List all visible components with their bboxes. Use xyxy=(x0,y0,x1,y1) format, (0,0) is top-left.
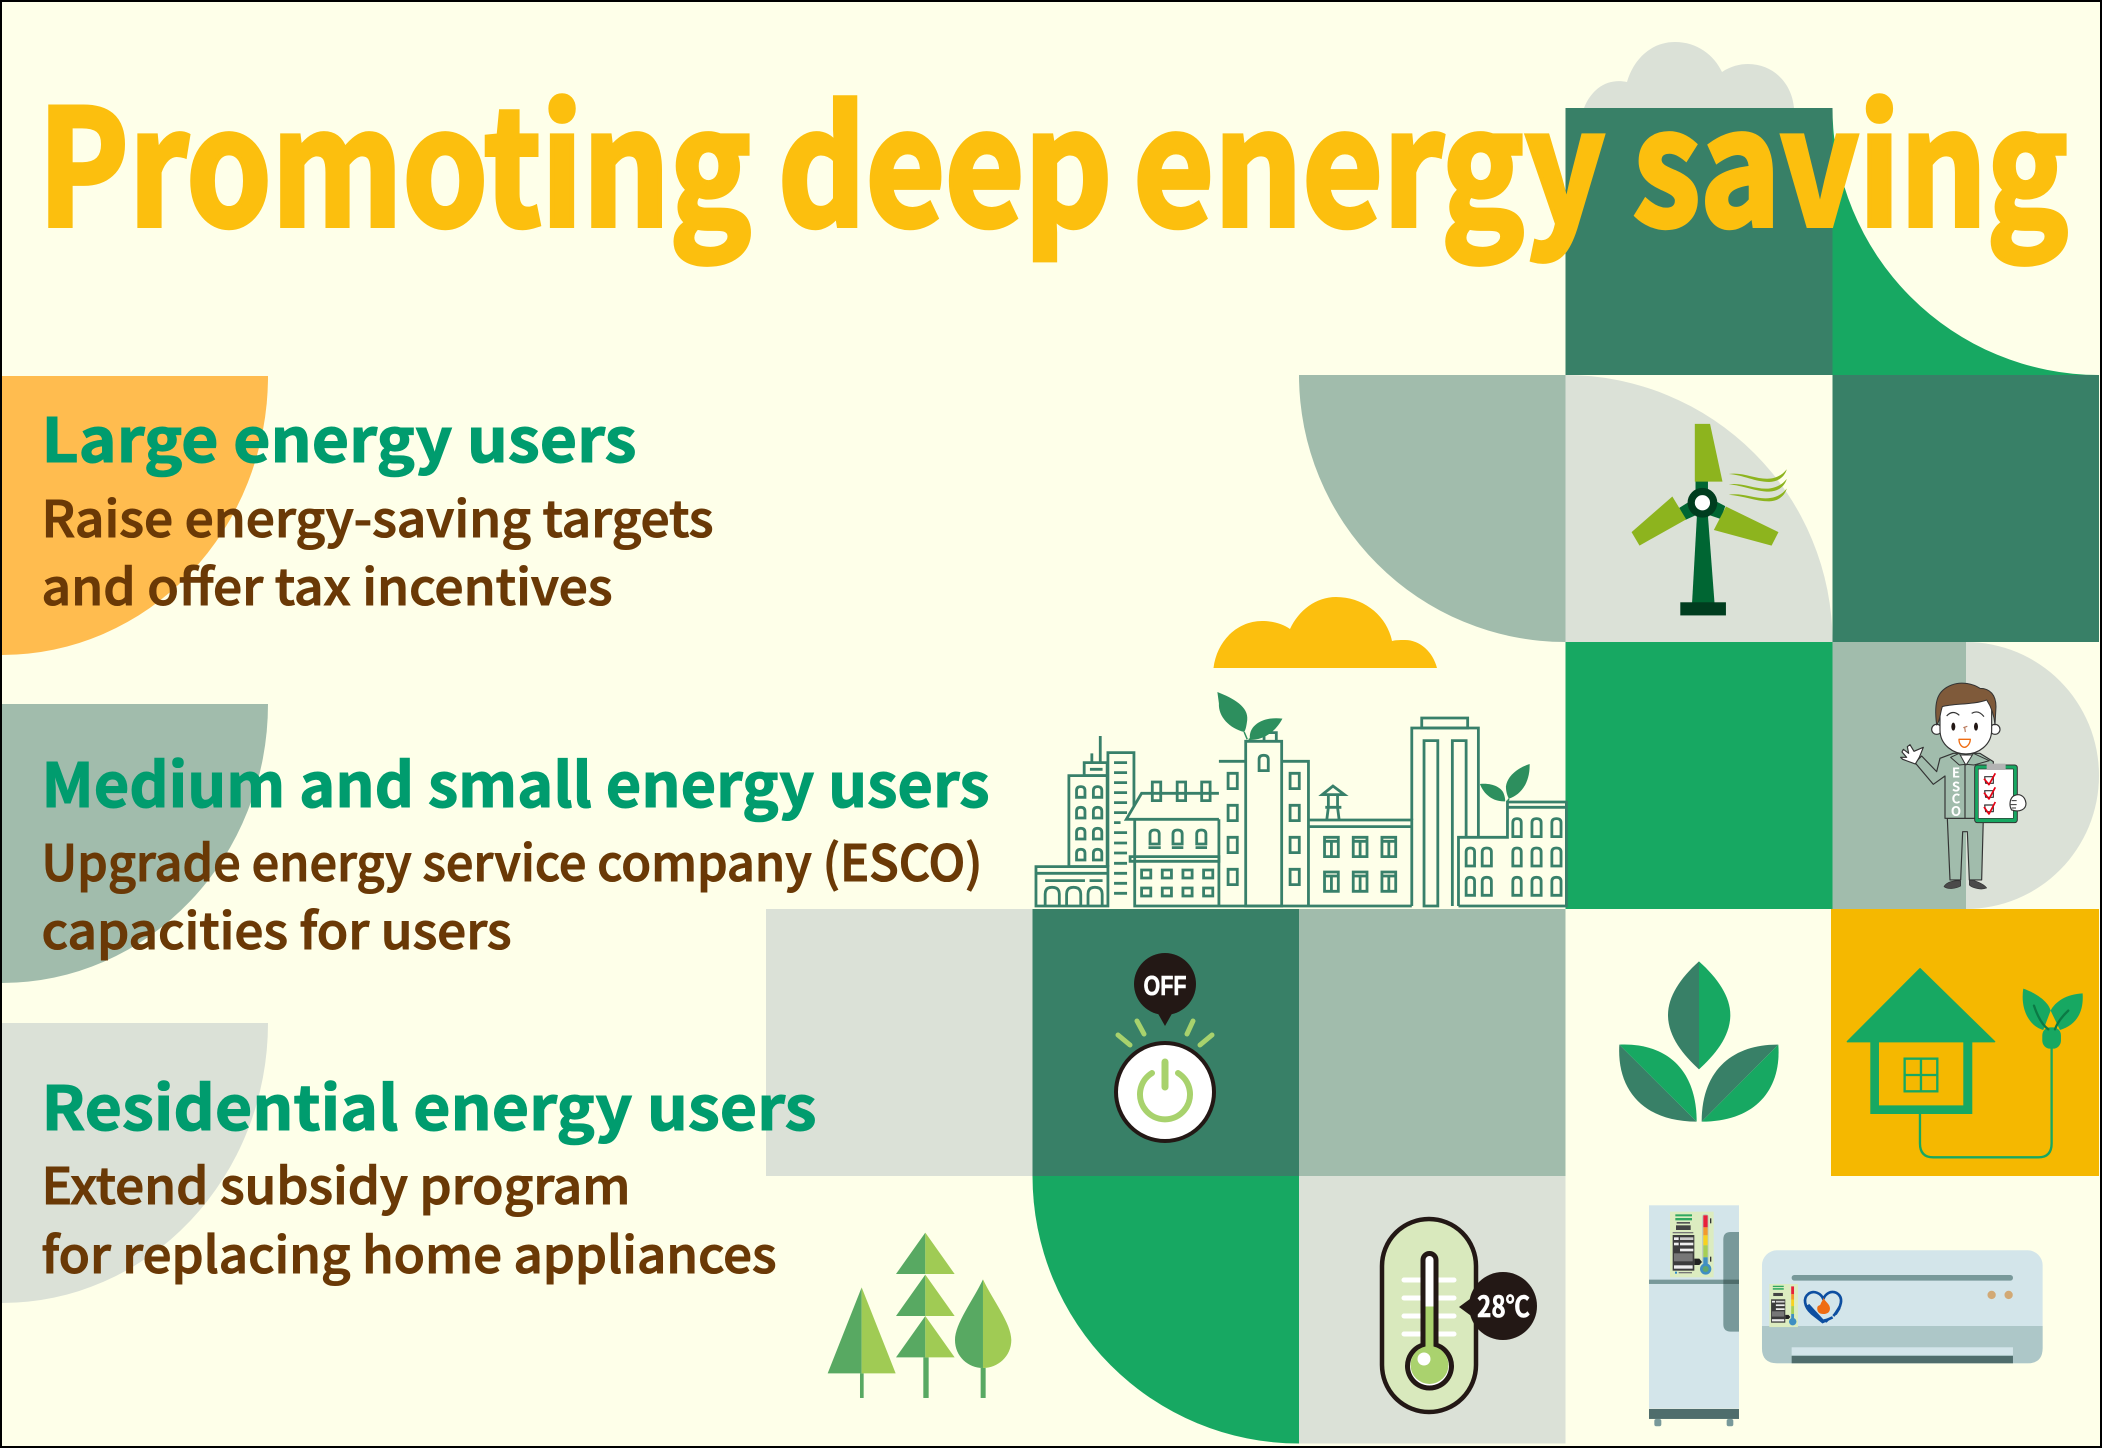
icon: house with plug and sprout xyxy=(1847,969,2083,1157)
cloud: yellow above city xyxy=(1214,597,1437,668)
text block: large energy users: Raise energy-saving targets xyxy=(42,480,714,552)
text block: large energy users: and offer tax incentives xyxy=(42,548,612,620)
text block: medium and small energy users: Upgrade energy service company (ESCO) xyxy=(42,824,982,896)
text block: residential energy users: Residential energy users xyxy=(42,1059,816,1148)
icon: energy label on air conditioner xyxy=(1769,1284,1798,1327)
label: 28 degrees: 28℃ xyxy=(1477,1284,1530,1326)
icon: heart energy logo xyxy=(1805,1292,1841,1323)
icon: three leaves xyxy=(1619,961,1779,1122)
icon: thermometer 28 degrees xyxy=(1382,1219,1537,1412)
text block: large energy users: Large energy users xyxy=(42,391,636,480)
text block: residential energy users: for replacing home appliances xyxy=(42,1216,776,1288)
icon: ESCO worker with clipboard xyxy=(1901,683,2026,889)
text block: medium and small energy users xyxy=(42,736,990,964)
icon: trees xyxy=(828,1233,1011,1398)
icon: ESCO worker with clipboard: S xyxy=(1952,776,1960,795)
illustration: green city skyline xyxy=(1036,692,1566,906)
icon: ESCO worker with clipboard: O xyxy=(1951,801,1961,820)
title xyxy=(38,40,2068,272)
icon: ESCO worker with clipboard: C xyxy=(1952,789,1961,808)
text block: large energy users xyxy=(42,391,714,620)
text block: medium and small energy users: Medium and small energy users xyxy=(42,736,990,825)
icon: air conditioner xyxy=(1762,1250,2043,1363)
icon: refrigerator xyxy=(1649,1205,1739,1426)
cloud: grey behind title xyxy=(1584,42,1794,108)
icon: wind turbine xyxy=(1632,424,1787,615)
text block: residential energy users: Extend subsidy program xyxy=(42,1147,630,1219)
text block: medium and small energy users: capacities for users xyxy=(42,892,512,964)
icon: energy label on refrigerator xyxy=(1670,1212,1714,1277)
title: Promoting xyxy=(38,40,751,272)
title: deep xyxy=(778,40,1112,272)
geometric tile grid xyxy=(766,108,2099,1444)
panel: left quarter-circle backgrounds xyxy=(2,376,268,1303)
icon: ESCO worker with clipboard: E xyxy=(1952,763,1960,782)
label: OFF: OFF xyxy=(1144,970,1186,1001)
title: energy xyxy=(1134,40,1604,272)
text block: residential energy users xyxy=(42,1059,816,1288)
icon: power off button xyxy=(1116,953,1214,1141)
